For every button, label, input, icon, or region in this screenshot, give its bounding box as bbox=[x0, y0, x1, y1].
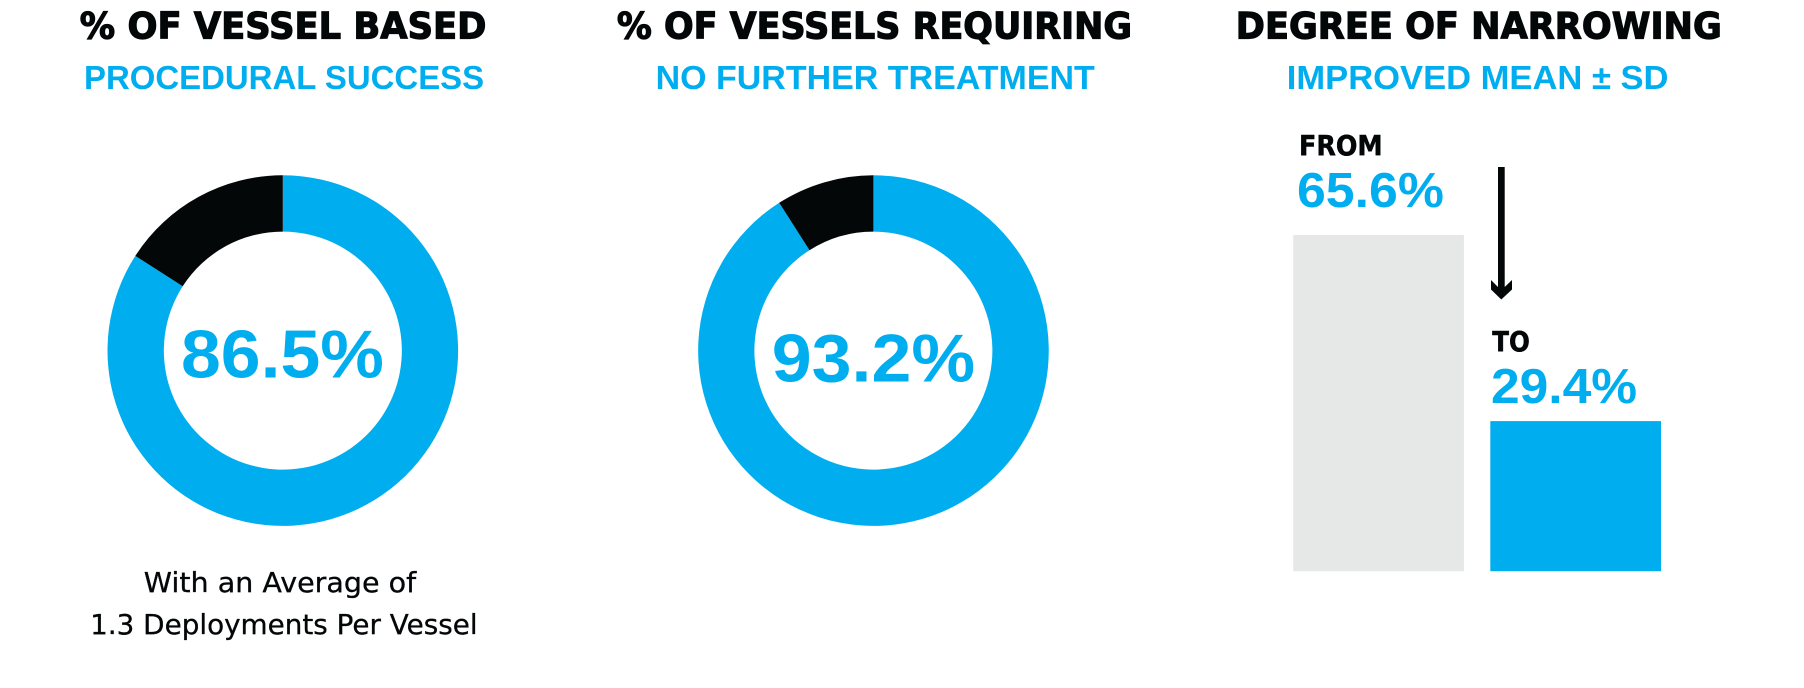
value: 29.4 percent: 29.4% bbox=[1491, 359, 1637, 414]
panel: procedural success bbox=[80, 5, 486, 641]
heading: percent of vessels requiring: % OF VESSELS REQUIRING bbox=[617, 5, 1132, 48]
caption: average deployments bbox=[90, 566, 478, 641]
bar: after bbox=[1490, 421, 1661, 571]
arrow: down bbox=[1491, 167, 1512, 300]
bar: before bbox=[1293, 235, 1464, 571]
donut chart: 93.2 percent bbox=[698, 175, 1049, 526]
caption: average deployments: 1.3 Deployments Per Vessel bbox=[90, 608, 478, 641]
donut chart: 86.5 percent bbox=[108, 175, 458, 526]
subheading: improved mean sd: IMPROVED MEAN ± SD bbox=[1287, 60, 1669, 97]
donut value: 86.5% bbox=[181, 316, 384, 392]
label: from: FROM bbox=[1299, 129, 1383, 162]
value: 65.6 percent: 65.6% bbox=[1297, 163, 1444, 218]
panel: no further treatment bbox=[617, 5, 1132, 526]
donut value: 93.2% bbox=[772, 320, 975, 396]
heading: percent of vessel based: % OF VESSEL BASED bbox=[80, 5, 486, 48]
caption: average deployments: With an Average of bbox=[144, 566, 417, 599]
panel: degree of narrowing bbox=[1236, 5, 1722, 571]
subheading: no further treatment: NO FURTHER TREATMENT bbox=[656, 60, 1095, 97]
label: to: TO bbox=[1492, 325, 1530, 358]
subheading: procedural success: PROCEDURAL SUCCESS bbox=[84, 60, 484, 97]
heading: degree of narrowing: DEGREE OF NARROWING bbox=[1236, 5, 1722, 48]
